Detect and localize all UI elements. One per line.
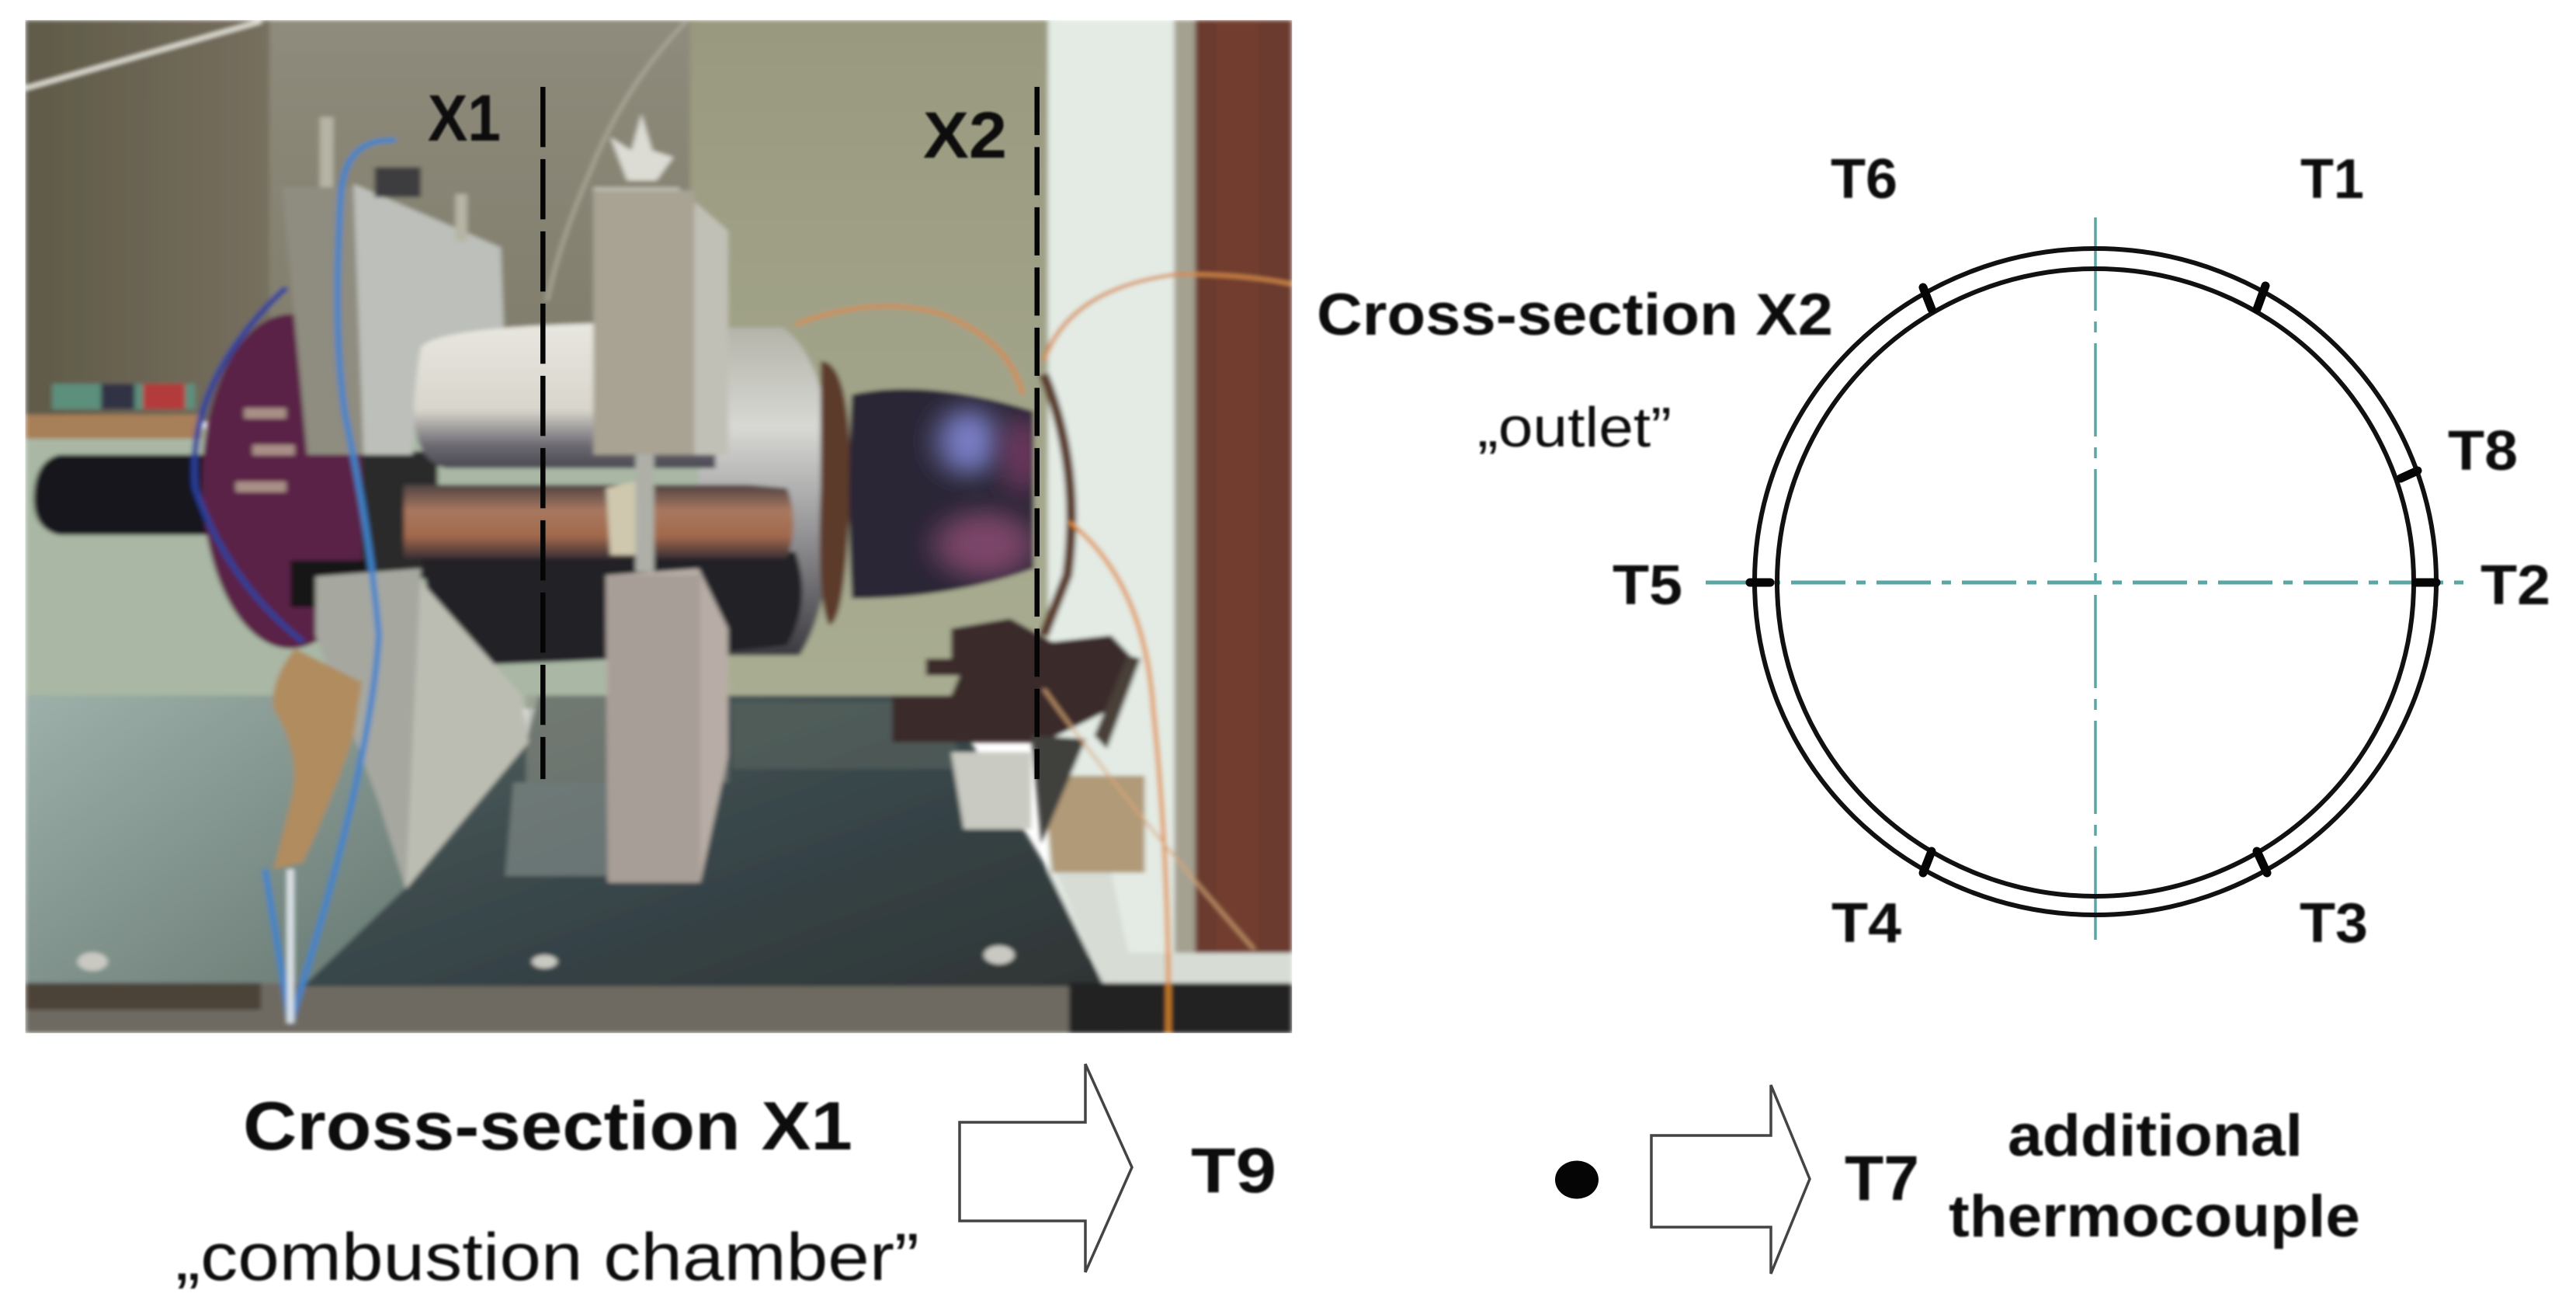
panel: photograph of the combustor test rig [26, 20, 1292, 1033]
caption: additional: additional [2008, 1103, 2303, 1169]
left table [26, 695, 446, 983]
bracket for probe [892, 618, 1140, 749]
label T6: T6 [1831, 148, 1897, 210]
purple end disc [202, 315, 379, 649]
thin grey wire [547, 22, 686, 301]
tan rear plate [1043, 776, 1145, 873]
grey blade below probe [1031, 735, 1086, 844]
caption: outlet: „outlet” [1477, 397, 1672, 459]
dashed section line X2 [1035, 87, 1040, 779]
caption: combustion chamber: „combustion chamber” [175, 1220, 919, 1295]
dots pattern on disc [236, 408, 294, 492]
blue-purple outlet nozzle [849, 389, 1040, 599]
bottom edge strip [26, 983, 1120, 1033]
blue thermocouple wires [194, 141, 396, 1023]
centre lines [1706, 217, 2468, 945]
chamber: copper liner band [404, 485, 793, 558]
label X2: X2 [923, 99, 1007, 172]
left mounting plate [353, 184, 505, 454]
silver small block [951, 753, 1031, 829]
outlet ring [1043, 374, 1071, 635]
left bracket foot [316, 569, 529, 889]
arrow to T9 [960, 1064, 1132, 1272]
panel: cross-section X1 legend [175, 1064, 1276, 1295]
dark recess behind the plate [362, 451, 438, 579]
heading: cross-section X1: Cross-section X1 [243, 1087, 852, 1164]
label T4: T4 [1831, 892, 1901, 955]
bright fitting below block [606, 482, 636, 555]
main dark table plate [303, 695, 1104, 986]
threaded rod [636, 454, 654, 572]
dashed section line X1 [540, 87, 545, 779]
chamber: dark lower shell [421, 551, 802, 666]
caption: thermocouple: thermocouple [1949, 1184, 2360, 1250]
chamber: bright upper shell [414, 322, 716, 468]
arrow to T7 [1651, 1085, 1810, 1274]
label T8: T8 [2448, 420, 2518, 482]
orange thermocouple wires [796, 274, 1292, 1033]
white cable top left [26, 22, 261, 89]
bolts on left plate [320, 117, 467, 241]
centre lower block [606, 569, 728, 883]
bright bolts on plate [78, 945, 1014, 971]
chamber: glass dome [699, 328, 833, 656]
label T7: T7 [1845, 1143, 1919, 1214]
marker dot [1555, 1160, 1599, 1199]
heading: cross-section X2: Cross-section X2 [1317, 282, 1833, 348]
label T1: T1 [2300, 148, 2364, 210]
tape around wires [273, 649, 362, 869]
black inlet tube [33, 454, 210, 535]
panel: cross-section X2 schematic [1317, 148, 2550, 955]
label T9: T9 [1191, 1135, 1276, 1206]
coloured roll on shelf [52, 384, 196, 409]
thermocouple markers [1750, 286, 2436, 873]
label X1: X1 [428, 82, 501, 155]
centre upper block [593, 187, 728, 454]
light reflection on plate [505, 782, 610, 876]
label T3: T3 [2300, 892, 2368, 955]
photo background wall [26, 20, 1292, 956]
label T5: T5 [1613, 555, 1682, 617]
wing nut [610, 113, 673, 180]
inner ring [1777, 269, 2414, 896]
brown flange ring [820, 361, 850, 625]
panel: additional thermocouple legend [1555, 1085, 2360, 1274]
label T2: T2 [2481, 555, 2550, 617]
outer ring [1755, 249, 2436, 915]
